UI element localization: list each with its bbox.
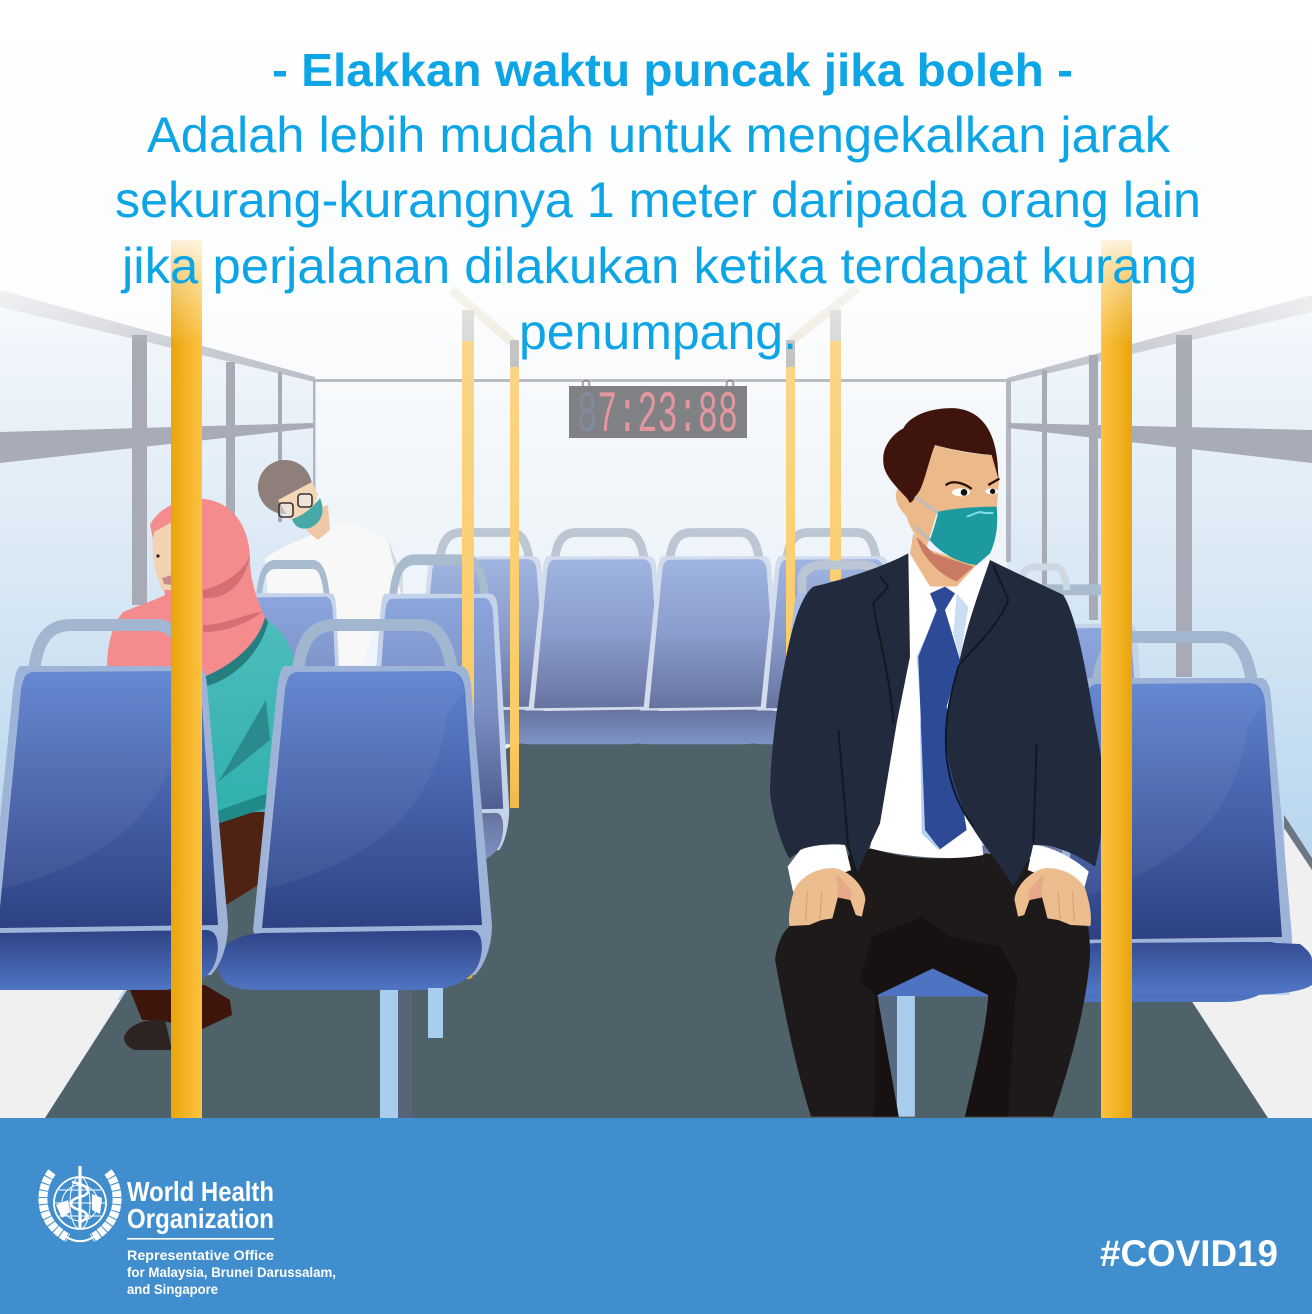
- mid row seat: behind front-left seat: [345, 560, 509, 863]
- heading text block: [115, 44, 1201, 360]
- far row seat: centre left: [508, 532, 671, 744]
- shirt: [870, 553, 990, 858]
- WHO wordmark: Organization: [127, 1203, 274, 1234]
- representative office: Representative Office: [127, 1247, 274, 1263]
- far row seat: right: [740, 532, 903, 744]
- body line 1: Adalah lebih mudah untuk mengekalkan jarak: [147, 107, 1171, 163]
- thick yellow handrail behind front seat: [462, 341, 474, 801]
- hijab: [107, 499, 265, 677]
- body line 4: penumpang.: [519, 304, 797, 360]
- large yellow pole: right: [1101, 240, 1132, 1118]
- passenger: woman in pink hijab: [107, 499, 297, 1050]
- floor: [0, 742, 1312, 1118]
- mask straps: [915, 497, 939, 541]
- large yellow pole: left: [171, 240, 202, 1118]
- right cuff: [1028, 845, 1089, 892]
- icon: WHO emblem: [43, 1166, 117, 1241]
- front seat: right of aisle centre: [218, 625, 492, 990]
- digital clock: 87:23:88: [577, 384, 738, 449]
- organization name: World Health: [127, 1176, 274, 1207]
- window frame: right: [1006, 295, 1312, 677]
- small seat fitting: [463, 971, 473, 979]
- footer band: [0, 1118, 1312, 1314]
- seat behind the man: [785, 565, 884, 680]
- seat post: [897, 996, 915, 1117]
- dress: [200, 617, 297, 818]
- WHO wordmark: and Singapore: [127, 1281, 218, 1297]
- seat legs: [380, 988, 443, 1118]
- bold headline: - Elakkan waktu puncak jika boleh -: [272, 44, 1073, 96]
- window frame: left: [0, 290, 316, 622]
- passenger: man in white shirt reading: [258, 460, 403, 665]
- seat in front of reading man: [224, 564, 344, 820]
- front seat: far left: [0, 625, 228, 990]
- neck: [910, 533, 977, 587]
- suit right side: [946, 560, 1104, 887]
- tie: [917, 610, 940, 852]
- left hand: [789, 868, 865, 926]
- WHO wordmark: for Malaysia, Brunei Darussalam,: [127, 1264, 336, 1280]
- face: [152, 522, 172, 590]
- face: [896, 445, 999, 547]
- lapels: [838, 565, 1037, 873]
- right wall skirting: [1284, 815, 1312, 1000]
- eyes: [946, 479, 999, 489]
- man's cuffs and hands: [788, 844, 1091, 926]
- body line 3: jika perjalanan dilakukan ketika terdapat kurang: [120, 238, 1197, 294]
- seat under man: [868, 963, 997, 1000]
- thin handrail poles: [452, 288, 858, 808]
- back wall rail: [315, 379, 1007, 382]
- front seat: far right: [1018, 637, 1312, 1002]
- ceiling fade: [0, 238, 1312, 345]
- hashtag: #COVID19: [1100, 1233, 1278, 1274]
- digital clock: [569, 380, 747, 449]
- face mask: [930, 507, 997, 565]
- body line 2: sekurang-kurangnya 1 meter daripada orang lain: [115, 172, 1201, 228]
- passenger: man in suit, upper body: [770, 408, 1104, 887]
- WHO wordmark: [127, 1176, 336, 1297]
- mid row handle: right: [1023, 567, 1067, 590]
- mid row seat: right: [954, 590, 1151, 893]
- right hand: [1014, 868, 1091, 926]
- left cuff: [788, 844, 851, 892]
- trousers and shoes: [217, 812, 268, 905]
- far row seat: left: [393, 532, 556, 744]
- hair: [883, 408, 998, 503]
- far row seat: centre right: [623, 532, 786, 744]
- trousers: [775, 848, 1090, 1117]
- passenger: man in suit, lower body: [775, 848, 1090, 1117]
- suit left side: [770, 553, 910, 873]
